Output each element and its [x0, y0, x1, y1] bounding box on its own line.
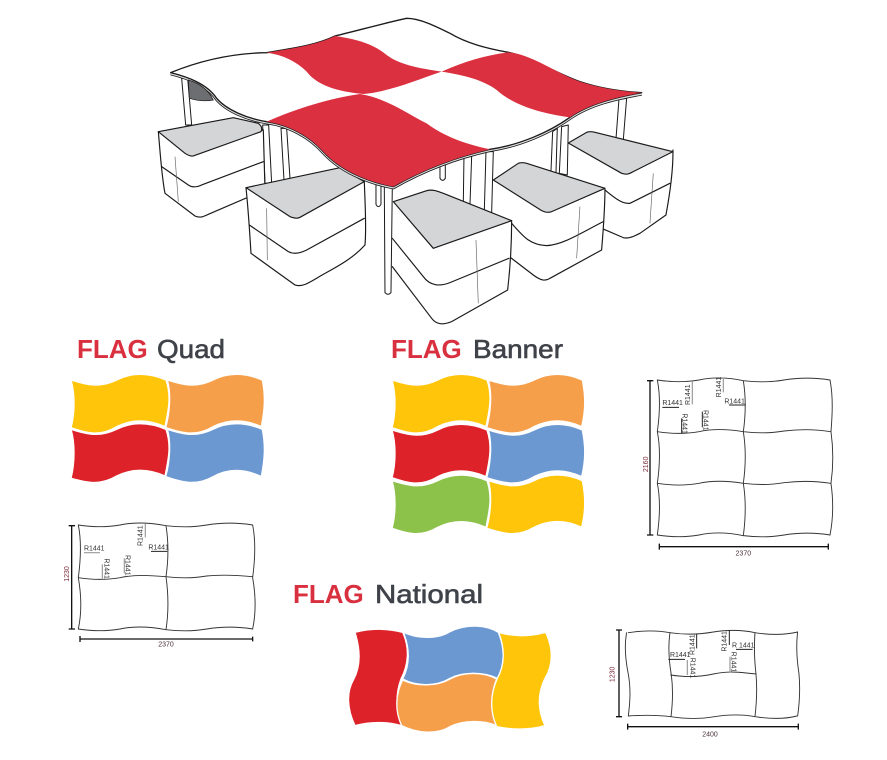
radius callouts: R1441: [123, 555, 130, 576]
panel outlines: [78, 523, 255, 631]
table top: [171, 18, 642, 187]
radius callouts: R1441: [702, 410, 709, 431]
radius callouts: R1441: [138, 525, 145, 546]
heading: FLAG Quad: [77, 334, 225, 364]
radius callouts: [668, 631, 755, 678]
dimension drawing: Banner: [643, 377, 833, 558]
radius callouts: R1441: [729, 652, 736, 672]
red panel: back right: [442, 52, 642, 117]
panel outlines: [625, 630, 800, 718]
dimension drawing: National: [610, 630, 800, 739]
heading: FLAG Banner: [391, 334, 563, 364]
heading: FLAG Banner: FLAG: [391, 334, 462, 364]
radius callouts: R1441: [690, 634, 697, 655]
radius callouts: R1441: [681, 413, 688, 434]
radius callouts: R1441: [685, 384, 692, 405]
overall dimensions: 2160: [643, 456, 650, 472]
seat: front left: [246, 168, 366, 286]
overall dimensions: 2370: [158, 642, 174, 649]
table edge: [171, 74, 642, 188]
overall dimensions: 1230: [64, 566, 71, 582]
panel outlines: [657, 378, 833, 537]
overall dimensions: 1230: [610, 666, 617, 682]
radius callouts: R1441: [689, 658, 696, 678]
red panel: back left: [267, 36, 442, 94]
dimension drawing: Quad: [64, 523, 255, 649]
heading: FLAG National: FLAG: [293, 579, 364, 609]
radius callouts: R1441: [724, 398, 745, 405]
radius callouts: R1441: [84, 546, 105, 553]
radius callouts: R1441: [662, 400, 683, 407]
overall dimensions: [643, 381, 828, 558]
radius callouts: R1441: [716, 377, 723, 397]
radius callouts: R1441: [102, 558, 109, 579]
shaded underside: [188, 80, 213, 101]
heading: FLAG Banner: Banner: [473, 334, 563, 364]
radius callouts: R1441: [670, 652, 691, 659]
heading: FLAG National: National: [375, 579, 483, 609]
flag: Banner coloured tiles: [392, 374, 585, 534]
red panel: front: [267, 94, 490, 187]
front table leg: [384, 187, 392, 294]
radius callouts: R1441: [148, 544, 169, 551]
radius callouts: [84, 523, 169, 579]
overall dimensions: 2370: [736, 551, 751, 558]
seat: front centre: [392, 190, 512, 324]
radius callouts: [662, 377, 746, 434]
seat: back left: [158, 118, 265, 217]
radius callouts: R 1441: [732, 643, 755, 650]
flag: Quad coloured tiles: [71, 374, 264, 483]
heading: FLAG Quad: FLAG: [77, 334, 148, 364]
flag: National coloured tiles: [349, 626, 551, 732]
table with seats illustration: [158, 18, 673, 324]
overall dimensions: [610, 630, 798, 739]
heading: FLAG National: [293, 579, 483, 609]
seat: far right: [568, 132, 673, 238]
overall dimensions: [64, 526, 253, 649]
heading: FLAG Quad: Quad: [157, 334, 225, 364]
seat: right front: [493, 163, 605, 280]
rear table legs: [182, 78, 627, 213]
radius callouts: R1441: [722, 631, 729, 652]
overall dimensions: 2400: [702, 732, 718, 739]
